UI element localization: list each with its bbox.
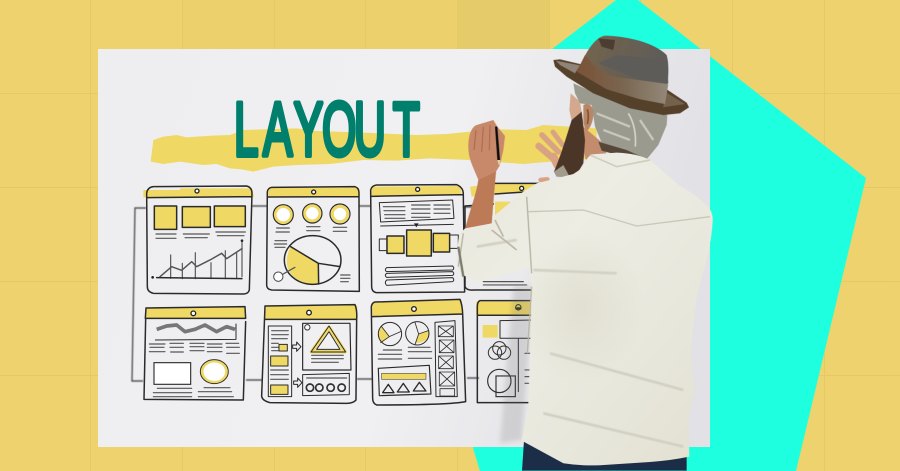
pen — [495, 127, 500, 160]
wireframes partly hidden behind the man — [465, 183, 538, 403]
wireframe 2: pie chart page — [267, 187, 359, 291]
hat crown — [580, 36, 668, 103]
wireframe connector lines — [132, 206, 479, 381]
wireframe D: venn page — [476, 301, 533, 403]
head, hair and beard — [553, 36, 689, 177]
cyan polygon accent — [470, 0, 866, 471]
wireframe 1: chart page — [143, 186, 254, 294]
whiteboard — [98, 49, 710, 447]
wireframe C: dashboard page — [371, 299, 466, 405]
wireframe 3: gallery page — [371, 185, 465, 293]
hat — [553, 36, 689, 115]
yellow brush stroke — [151, 125, 597, 172]
shadow of the man on the board — [500, 287, 533, 443]
wireframes, bottom row — [144, 299, 466, 405]
hat brim — [553, 59, 689, 115]
shirt soft shading — [517, 230, 643, 383]
wireframe A: data page — [144, 307, 246, 400]
title: LAYOUT — [234, 88, 420, 173]
face edge — [569, 93, 583, 125]
hat band — [577, 55, 668, 104]
ear — [583, 104, 593, 131]
shirt seams and creases — [528, 210, 710, 226]
shirt — [457, 153, 713, 465]
second hand on board — [539, 132, 563, 180]
man wearing hat, seen from behind — [457, 36, 713, 471]
wireframe 4: top right — [465, 183, 538, 290]
wireframe B: flow page — [262, 305, 357, 403]
jeans — [522, 441, 687, 471]
neck — [582, 127, 607, 163]
drawing forearm and hand — [465, 120, 505, 229]
grey hair — [573, 83, 667, 159]
wireframes, top row — [143, 185, 465, 294]
beard — [554, 112, 585, 177]
